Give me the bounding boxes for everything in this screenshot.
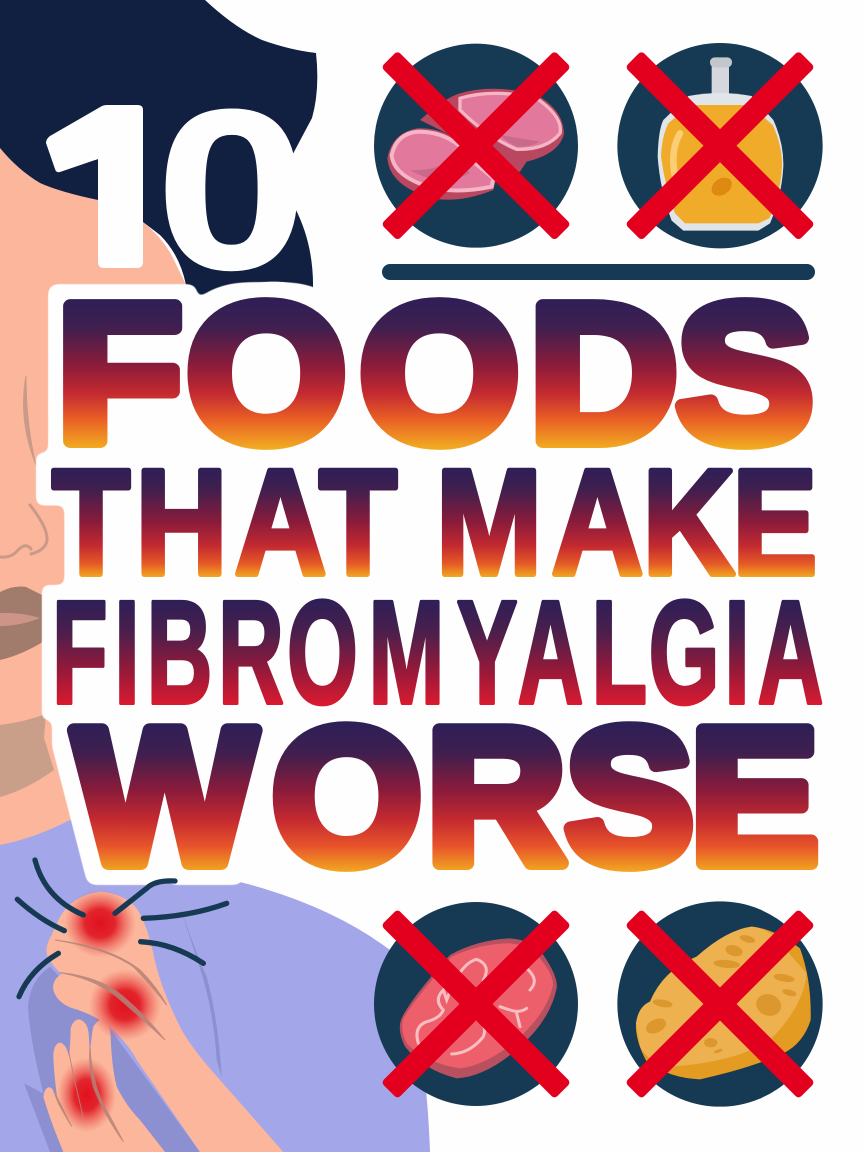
- upper lip: [0, 587, 46, 660]
- illustration: face skin: [0, 148, 210, 850]
- skin creases: [53, 940, 167, 1142]
- pain radiating lines: [17, 860, 227, 997]
- title text with white sticker outline: [52, 263, 823, 904]
- title line: THAT MAKE: THAT MAKE: [52, 439, 817, 606]
- dark circle: [617, 43, 823, 248]
- cheek crease: [24, 376, 36, 465]
- pain glow: wrist: [89, 969, 161, 1041]
- pain glow: fingers: [57, 1058, 116, 1132]
- title line: WORSE: WORSE: [74, 688, 819, 904]
- digit 1: 1: [40, 72, 170, 307]
- big number 10: [46, 105, 296, 272]
- illustration: facial details: [0, 376, 54, 797]
- red cross: [381, 909, 571, 1099]
- divider bar: [382, 264, 815, 280]
- mouth opening: [0, 613, 40, 626]
- bottle neck: [712, 65, 729, 97]
- red cross: [625, 51, 815, 241]
- icon: crossed-out red meat: [374, 902, 578, 1106]
- title line: FOODS: FOODS: [57, 263, 813, 483]
- illustration: shirt: [0, 820, 430, 1152]
- icon: crossed-out oil bottle: [617, 43, 823, 248]
- marbling: [417, 959, 534, 1054]
- upper hand and forearm: [46, 892, 283, 1152]
- upper steak: [420, 89, 564, 177]
- dark circle: [374, 44, 578, 248]
- illustration: hands in pain: [24, 889, 283, 1152]
- lower hand: [43, 1019, 165, 1152]
- highlight: [673, 133, 680, 177]
- shirt crease: [176, 895, 222, 1077]
- shirt shadow: [24, 967, 200, 1152]
- dark circle: [617, 901, 823, 1107]
- oil spot: [708, 174, 735, 200]
- top: [636, 927, 807, 1067]
- red cross: [625, 909, 815, 1099]
- bottle cap: [710, 57, 732, 67]
- icon: crossed-out pink meat: [374, 44, 578, 248]
- pain glow: knuckle: [64, 889, 136, 957]
- dark circle: [374, 902, 578, 1106]
- digit 0: 0: [156, 63, 308, 317]
- red cross: [381, 51, 571, 241]
- meat top: [402, 943, 553, 1068]
- title line: FIBROMYALGIA: FIBROMYALGIA: [52, 570, 823, 734]
- bottle glass: [658, 93, 783, 231]
- illustration: hair: [0, 0, 317, 300]
- oil: [661, 105, 782, 223]
- lower steak: [387, 128, 497, 200]
- crust: [636, 927, 811, 1079]
- white backing behind title: [55, 290, 260, 840]
- chin shadow: [0, 714, 54, 797]
- icon: crossed-out bread: [617, 901, 823, 1107]
- bubbles: [644, 934, 797, 1054]
- meat edge: [400, 938, 557, 1078]
- nose: [0, 505, 47, 557]
